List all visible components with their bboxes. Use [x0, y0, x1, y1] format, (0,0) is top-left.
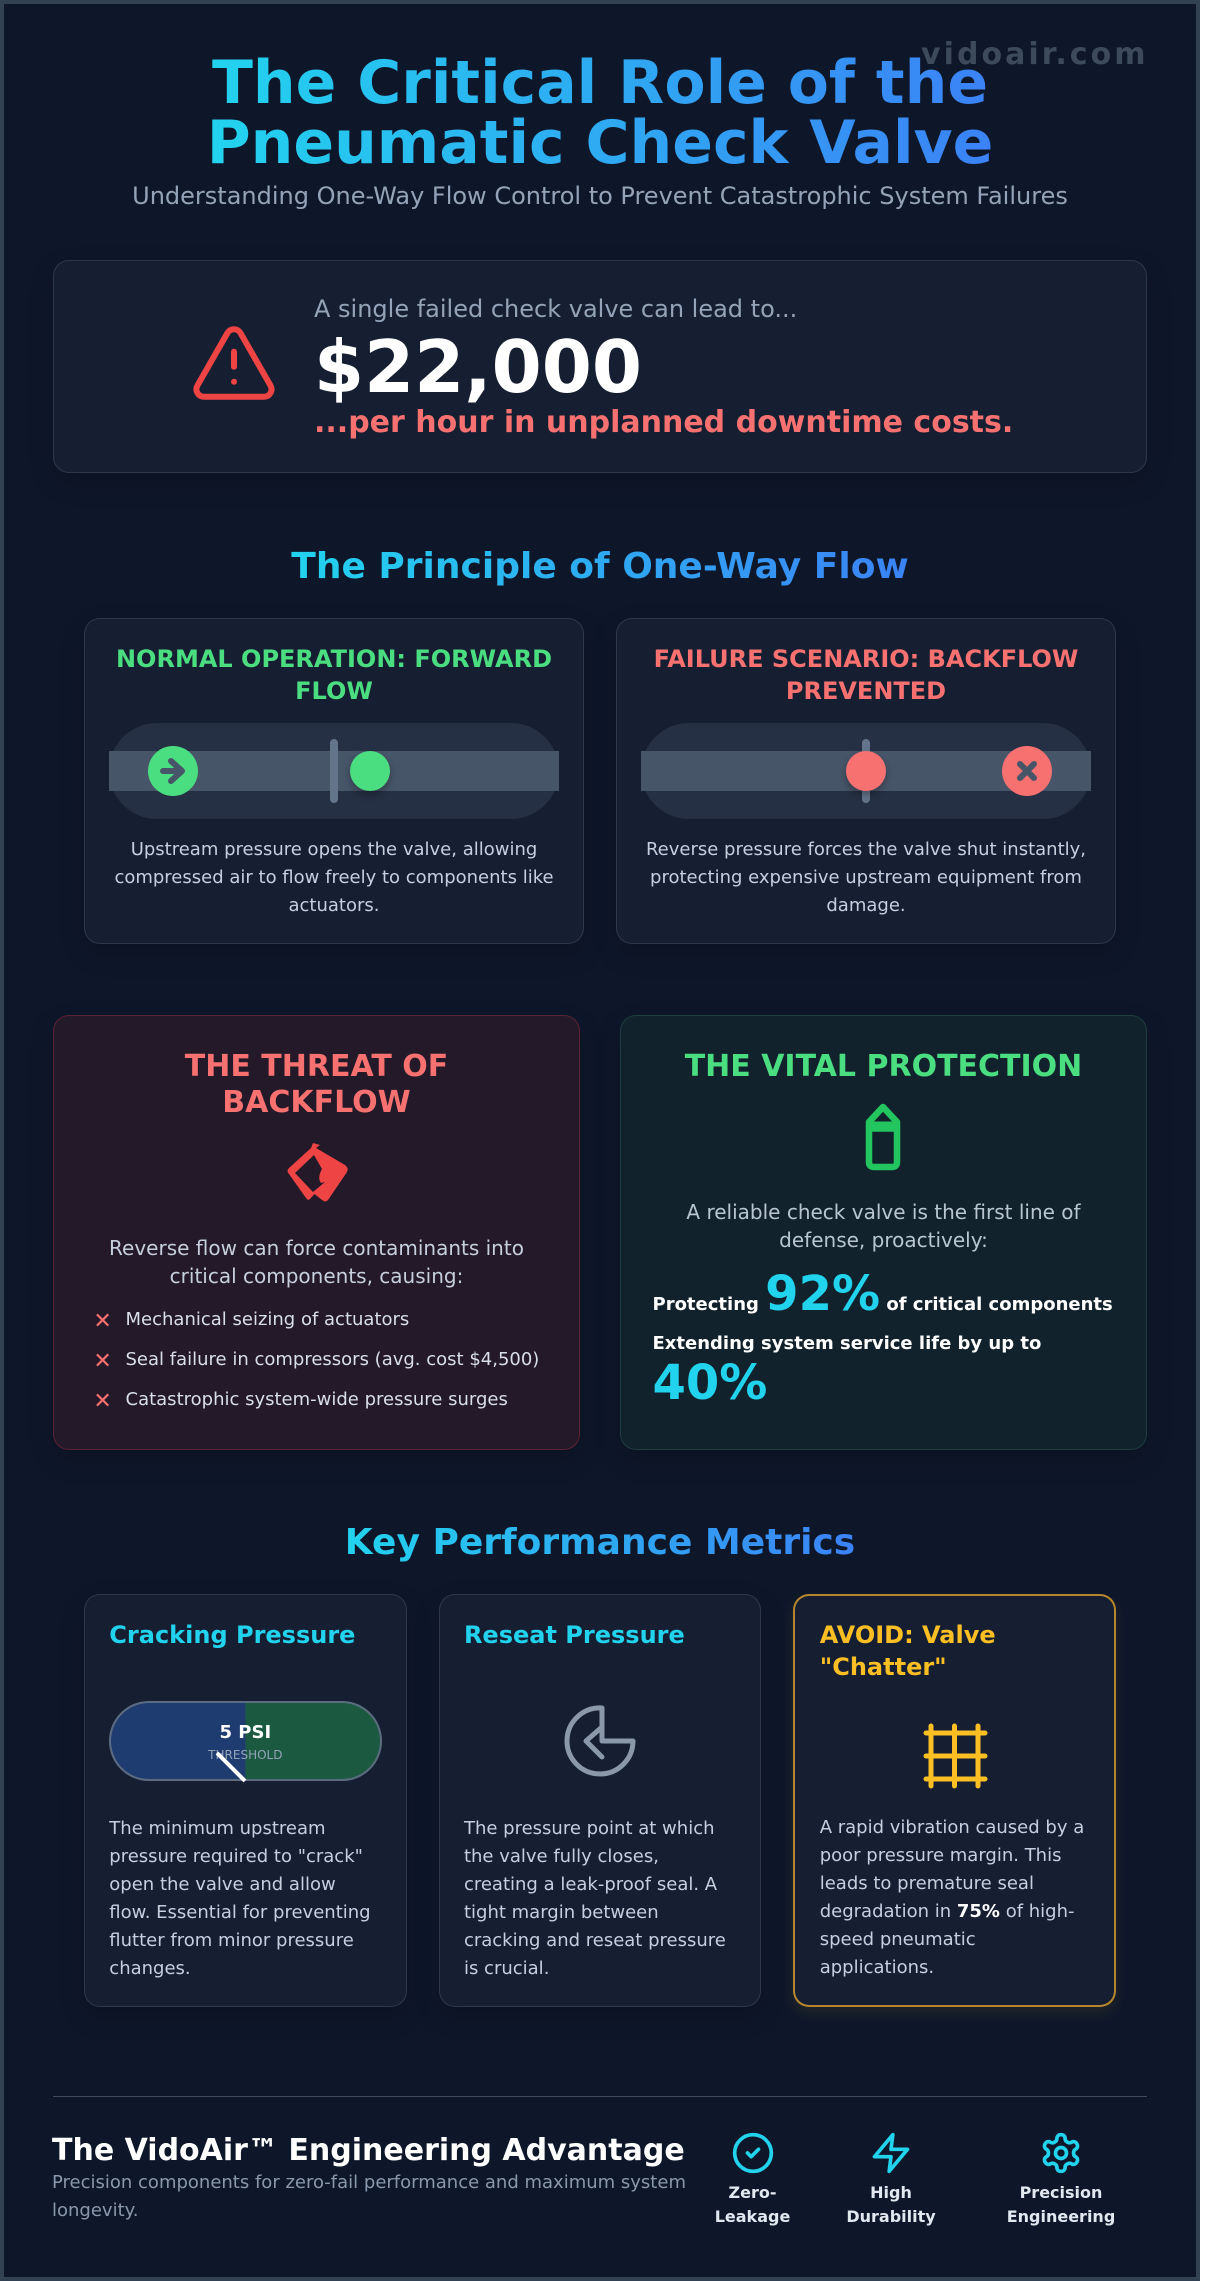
- description: cracking pressure: flutter from minor pressure: [109, 1930, 354, 1951]
- feature: zero-leakage: [715, 2132, 790, 2226]
- description: reseat pressure: creating a leak-proof seal. A: [464, 1874, 717, 1895]
- description: chatter: speed pneumatic: [820, 1928, 976, 1950]
- intro text: Reverse flow can force contaminants into: [109, 1236, 524, 1260]
- list item: Seal failure in compressors (avg. cost $4,500): [126, 1349, 539, 1370]
- icon: shield valve: [866, 1104, 900, 1170]
- heading: threat: [184, 1049, 448, 1120]
- label: Leakage: [715, 2206, 790, 2226]
- stat: 40 percent: [652, 1333, 1041, 1410]
- label: [846, 2182, 936, 2226]
- list item: Catastrophic system-wide pressure surges: [126, 1389, 508, 1410]
- gauge: 5 PSI threshold: 5 PSI: [220, 1722, 271, 1743]
- intro text: [109, 1236, 524, 1288]
- title: [207, 48, 993, 178]
- list item: ✕: [93, 1388, 112, 1414]
- cost qualifier: ...per hour in unplanned downtime costs.: [314, 405, 1013, 440]
- description: reseat pressure: tight margin between: [464, 1902, 659, 1923]
- footer tagline: Precision components for zero-fail performance and maximum system: [52, 2172, 686, 2193]
- feature: precision engineering: [1007, 2132, 1115, 2226]
- icon: vibration grid: [924, 1724, 988, 1788]
- description: failure scenario: Reverse pressure forces the valve shut instantly,: [646, 839, 1086, 860]
- panel: threat of backflow: [53, 1015, 580, 1450]
- description: cracking pressure: open the valve and allow: [109, 1874, 336, 1895]
- heading: threat: THE THREAT OF: [185, 1049, 448, 1084]
- icon: contamination: [288, 1143, 348, 1202]
- heading: failure scenario: PREVENTED: [786, 677, 946, 705]
- intro text: [686, 1200, 1081, 1252]
- label: Engineering: [1007, 2206, 1115, 2226]
- footer tagline: [52, 2172, 686, 2221]
- label: Durability: [846, 2206, 936, 2226]
- heading: protection: THE VITAL PROTECTION: [685, 1049, 1082, 1084]
- description: chatter: leads to premature seal: [820, 1872, 1034, 1894]
- diagram: valve closed: [641, 723, 1091, 819]
- heading: avoid chatter: "Chatter": [820, 1653, 947, 1681]
- icon: gear: [1042, 2132, 1080, 2174]
- cost figure: $22,000: [314, 325, 642, 409]
- description: failure scenario: [646, 839, 1086, 916]
- icon: pressure dial: [564, 1705, 636, 1776]
- icon: warning triangle: [193, 326, 275, 400]
- heading: threat: BACKFLOW: [222, 1085, 411, 1120]
- diagram: valve open: [109, 723, 559, 819]
- heading: normal operation: [116, 645, 552, 705]
- title: The Critical Role of the: [212, 48, 988, 118]
- footer heading: The VidoAir™ Engineering Advantage: [52, 2133, 685, 2168]
- list item: ✕: [93, 1308, 112, 1334]
- icon: blocked cross: [1002, 746, 1052, 796]
- heading: normal operation: FLOW: [295, 677, 373, 705]
- description: normal operation: compressed air to flow freely to components like: [114, 867, 554, 888]
- panel: downtime cost callout: [53, 260, 1147, 473]
- panel: vital protection: [620, 1015, 1147, 1450]
- stat: 92 percent: Protecting 92% of critical components: [652, 1266, 1113, 1322]
- description: normal operation: Upstream pressure opens the valve, allowing: [131, 839, 537, 860]
- description: chatter: applications.: [820, 1956, 934, 1978]
- label: [1007, 2182, 1115, 2226]
- intro text: A reliable check valve is the first line of: [686, 1200, 1081, 1224]
- watermark: vidoair.com: [921, 36, 1149, 72]
- heading: avoid chatter: AVOID: Valve: [820, 1621, 996, 1649]
- panel: cracking pressure: [84, 1594, 407, 2007]
- gauge: 5 PSI threshold: [109, 1701, 382, 1781]
- description: reseat pressure: cracking and reseat pressure: [464, 1930, 726, 1951]
- description: cracking pressure: The minimum upstream: [109, 1818, 326, 1839]
- lead-in text: A single failed check valve can lead to...: [314, 294, 797, 322]
- icon: check circle: [732, 2132, 774, 2174]
- description: reseat pressure: is crucial.: [464, 1958, 549, 1979]
- description: reseat pressure: The pressure point at which: [464, 1818, 714, 1839]
- stat: 40 percent: Extending system service life by up to: [652, 1333, 1041, 1354]
- label: Precision: [1020, 2182, 1102, 2202]
- label: [715, 2182, 790, 2226]
- stat: 40 percent: 40%: [652, 1354, 767, 1410]
- heading: failure scenario: FAILURE SCENARIO: BACKFLOW: [654, 645, 1078, 673]
- list item: Mechanical seizing of actuators: [126, 1309, 409, 1330]
- gauge: 5 PSI threshold: THRESHOLD: [208, 1748, 282, 1762]
- description: chatter: degradation in 75% of high-: [820, 1900, 1074, 1922]
- description: chatter: [820, 1816, 1084, 1978]
- description: failure scenario: protecting expensive upstream equipment from: [650, 867, 1082, 888]
- feature: high durability: [846, 2132, 936, 2226]
- heading: reseat pressure: Reseat Pressure: [464, 1621, 685, 1649]
- label: Zero-: [728, 2182, 776, 2202]
- list item: ✕: [93, 1348, 112, 1374]
- intro text: defense, proactively:: [779, 1228, 988, 1252]
- list: consequences: [93, 1308, 539, 1414]
- icon: lightning bolt: [872, 2132, 910, 2174]
- panel: reseat pressure: [439, 1594, 761, 2007]
- description: failure scenario: damage.: [826, 895, 906, 916]
- panel: normal operation: [84, 618, 584, 944]
- description: chatter: A rapid vibration caused by a: [820, 1816, 1084, 1838]
- footer tagline: longevity.: [52, 2200, 138, 2221]
- description: normal operation: [114, 839, 554, 916]
- description: cracking pressure: pressure required to "crack": [109, 1846, 363, 1867]
- valve ball: open: [350, 751, 390, 791]
- heading: failure scenario: [654, 645, 1078, 705]
- description: cracking pressure: changes.: [109, 1958, 191, 1979]
- intro text: critical components, causing:: [170, 1264, 463, 1288]
- subtitle: Understanding One-Way Flow Control to Prevent Catastrophic System Failures: [132, 182, 1068, 210]
- title: Pneumatic Check Valve: [207, 108, 993, 178]
- description: reseat pressure: [464, 1818, 726, 1979]
- description: reseat pressure: the valve fully closes,: [464, 1846, 659, 1867]
- icon: forward arrow: [148, 746, 198, 796]
- heading: key performance metrics: Key Performance Metrics: [345, 1522, 855, 1562]
- panel: failure scenario: [616, 618, 1116, 944]
- heading: cracking pressure: Cracking Pressure: [109, 1621, 355, 1649]
- heading: avoid chatter: [820, 1621, 996, 1681]
- valve ball: seated: [846, 751, 886, 791]
- description: chatter: poor pressure margin. This: [820, 1844, 1061, 1866]
- heading: normal operation: NORMAL OPERATION: FORWARD: [116, 645, 552, 673]
- heading: principle of one-way flow: The Principle of One-Way Flow: [291, 546, 909, 586]
- description: cracking pressure: flow. Essential for preventing: [109, 1902, 371, 1923]
- label: High: [870, 2182, 912, 2202]
- panel: avoid valve chatter: [793, 1594, 1116, 2007]
- description: normal operation: actuators.: [288, 895, 380, 916]
- description: cracking pressure: [109, 1818, 371, 1979]
